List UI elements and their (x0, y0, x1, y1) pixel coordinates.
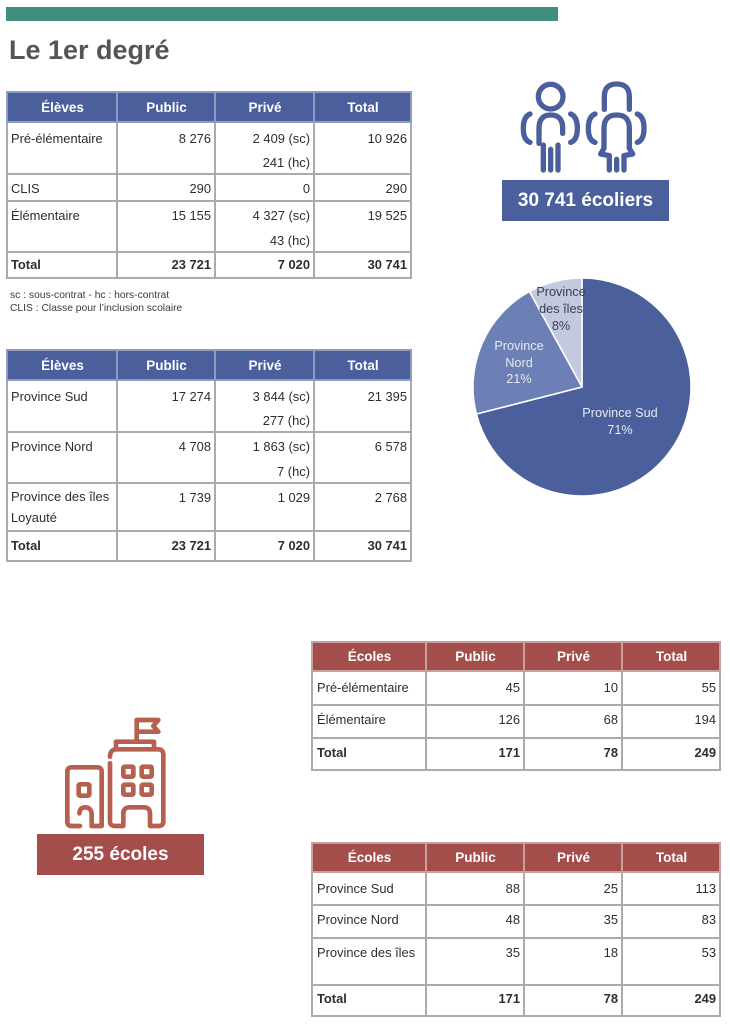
table: élèves par niveau: 2 409 (sc) (253, 130, 310, 146)
table: écoles par province: 35 (604, 912, 618, 927)
table: écoles par niveau: 194 (694, 712, 716, 727)
table: élèves par niveau: 10 926 (368, 130, 407, 146)
icon: children (520, 81, 647, 173)
table: élèves par niveau: 15 155 (172, 208, 211, 223)
table: élèves par province: 277 (hc) (263, 413, 310, 428)
table: élèves par niveau: 0 (303, 181, 310, 196)
table: écoles par niveau: Pré-élémentaire (317, 680, 409, 695)
table: écoles par province: 249 (694, 991, 716, 1006)
table: écoles par niveau: Total (317, 744, 347, 760)
table: écoles par province: Écoles (348, 850, 391, 865)
table: élèves par province: Loyauté (11, 510, 57, 525)
table: écoles par province: 48 (506, 912, 520, 927)
pie chart: 21% (506, 372, 532, 386)
table: écoles par niveau: Écoles (348, 649, 391, 664)
table: écoles par province: Province Sud (317, 881, 394, 896)
title: Le 1er degré (9, 35, 170, 65)
badge: écoliers: 30 741 écoliers (518, 190, 653, 211)
table: élèves par niveau (6, 91, 412, 279)
table: écoles par province: 171 (498, 991, 520, 1006)
table: écoles par niveau: Élémentaire (317, 712, 386, 727)
table: écoles par province: 18 (604, 945, 618, 960)
table: écoles par province: 53 (702, 945, 716, 960)
badge: écoles: 255 écoles (72, 844, 169, 865)
table: écoles par niveau: 10 (604, 680, 618, 695)
table: écoles par province: Total (656, 850, 687, 865)
table: élèves par niveau: Total (11, 257, 41, 272)
pie chart: Province Sud (582, 406, 658, 420)
footnote: sc : sous-contrat - hc : hors-contrat (10, 290, 169, 301)
table: élèves par niveau: Privé (248, 100, 282, 114)
table: écoles par province: Province Nord (317, 912, 399, 927)
table: élèves par niveau: Élémentaire (11, 208, 80, 223)
table: élèves par province: Province des îles (11, 489, 109, 504)
badge: écoles (37, 834, 204, 875)
table: élèves par province: 7 020 (278, 538, 310, 553)
pie chart: Nord (505, 356, 533, 370)
table: élèves par province: 1 739 (179, 490, 211, 505)
table: écoles par province: Public (455, 850, 496, 865)
table: élèves par niveau: 30 741 (368, 257, 407, 272)
table: écoles par province: 78 (604, 991, 618, 1006)
table: écoles par province: 83 (702, 912, 716, 927)
icon: school (65, 718, 166, 828)
pie chart: Province (494, 339, 544, 353)
badge: écoliers (502, 180, 669, 221)
table: élèves par province: Élèves (41, 358, 84, 372)
table: élèves par province: 1 863 (sc) (253, 439, 310, 454)
table: écoles par niveau: 78 (604, 744, 618, 760)
table: élèves par niveau: CLIS (11, 181, 40, 196)
table: élèves par niveau: 290 (385, 181, 407, 196)
table: écoles par province: Total (317, 991, 347, 1006)
pie chart: 71% (607, 423, 633, 437)
table: élèves par niveau: 23 721 (172, 257, 211, 272)
pie chart: des îles (539, 302, 583, 316)
table: élèves par province: 30 741 (368, 538, 407, 553)
table: élèves par province: 23 721 (172, 538, 211, 553)
table: écoles par niveau: 126 (498, 712, 520, 727)
table: écoles par province: Province des îles (317, 945, 415, 960)
table: élèves par province: Total (11, 538, 41, 553)
table: élèves par province: Public (146, 358, 187, 372)
footnote (10, 290, 182, 314)
table: écoles par niveau: 45 (506, 680, 520, 695)
table: écoles par niveau: 55 (702, 680, 716, 695)
pie chart: 8% (552, 319, 570, 333)
table: élèves par niveau: Total (347, 100, 379, 114)
table: élèves par province: 3 844 (sc) (253, 388, 310, 404)
table: écoles par province: 113 (695, 881, 716, 896)
table: écoles par niveau: Privé (557, 649, 590, 664)
table: écoles par province: 88 (506, 881, 520, 896)
table: écoles par niveau: 68 (604, 712, 618, 727)
table: élèves par province: 21 395 (368, 388, 407, 404)
table: élèves par niveau: 290 (189, 181, 211, 196)
table: élèves par niveau: Élèves (41, 100, 84, 114)
pie chart: Province (536, 285, 586, 299)
table: élèves par niveau: 4 327 (sc) (253, 208, 310, 223)
table: élèves par province: 17 274 (172, 388, 211, 404)
table: élèves par province: Privé (248, 358, 282, 372)
top accent bar (6, 7, 558, 21)
table: élèves par province: Total (347, 358, 379, 372)
table: écoles par niveau: Total (656, 649, 687, 664)
table: élèves par niveau: 8 276 (179, 130, 211, 146)
pie chart (474, 278, 690, 496)
table: écoles par province: Privé (557, 850, 590, 865)
table: élèves par province: 4 708 (179, 439, 211, 454)
table: élèves par niveau: 19 525 (368, 208, 407, 223)
table: écoles par niveau: 171 (498, 744, 520, 760)
table: écoles par province: 25 (604, 881, 618, 896)
table: élèves par niveau: 43 (hc) (270, 232, 310, 248)
table: écoles par niveau: Public (455, 649, 496, 664)
table: écoles par niveau (311, 641, 721, 771)
table: élèves par niveau: 7 020 (278, 257, 310, 272)
table: élèves par province: 2 768 (375, 490, 407, 505)
table: élèves par niveau: 241 (hc) (263, 155, 310, 170)
table: élèves par province: 1 029 (278, 490, 310, 505)
table: élèves par niveau: Pré-élémentaire (11, 130, 103, 146)
table: élèves par niveau: Public (146, 100, 187, 114)
table: écoles par province (311, 842, 721, 1017)
table: écoles par province: 35 (506, 945, 520, 960)
footnote: CLIS : Classe pour l’inclusion scolaire (10, 302, 182, 314)
table: élèves par province: 7 (hc) (277, 464, 310, 478)
table: écoles par niveau: 249 (694, 744, 716, 760)
table: élèves par province: 6 578 (375, 439, 407, 454)
table: élèves par province: Province Nord (11, 439, 93, 454)
table: élèves par province: Province Sud (11, 388, 88, 404)
table: élèves par province (6, 349, 412, 562)
